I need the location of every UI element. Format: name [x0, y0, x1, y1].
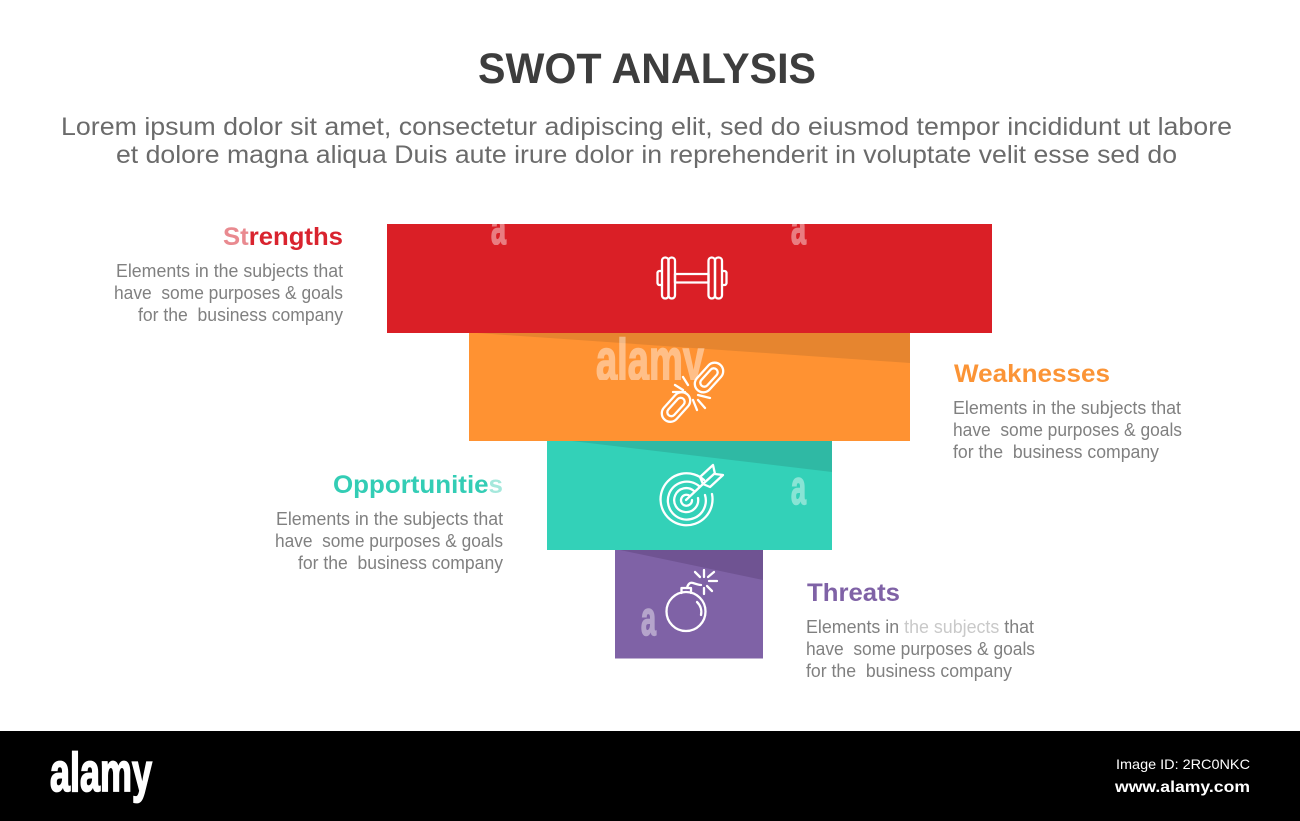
- icon: broken chain link: [658, 359, 727, 425]
- icon: bomb: [666, 570, 717, 631]
- watermark: a marks on strengths bar: a: [491, 202, 506, 255]
- footer logo: alamy: [50, 741, 152, 803]
- body: opportunities: for the business company: [298, 553, 503, 573]
- body: strengths: Elements in the subjects that: [116, 261, 343, 281]
- body: threats: have some purposes & goals: [806, 639, 1035, 659]
- body: opportunities: [275, 509, 503, 573]
- panel: weaknesses bar: [469, 328, 910, 441]
- body: weaknesses: [953, 398, 1182, 462]
- text block: weaknesses: [953, 360, 1182, 462]
- heading: opportunities: Opportunities: [333, 471, 503, 499]
- text block: opportunities: [275, 471, 503, 573]
- title: SWOT ANALYSIS: [478, 45, 816, 93]
- body: opportunities: have some purposes & goals: [275, 531, 503, 551]
- panel: opportunities bar: [547, 441, 832, 550]
- panel: threats bar: [615, 550, 763, 658]
- body: strengths: have some purposes & goals: [114, 283, 343, 303]
- subtitle text: et dolore magna aliqua Duis aute irure dolor in reprehenderit in voluptate velit esse sed do: [116, 141, 1177, 169]
- panel: strengths bar: [387, 224, 992, 333]
- body: weaknesses: for the business company: [953, 442, 1159, 462]
- icon: target with arrow: [661, 465, 723, 525]
- subtitle text: Lorem ipsum dolor sit amet, consectetur adipiscing elit, sed do eiusmod tempor incididunt ut labore: [61, 113, 1232, 141]
- watermark: a on threats bar: a: [641, 593, 656, 646]
- subtitle text: [61, 113, 1232, 169]
- text block: strengths: [114, 223, 343, 325]
- watermark: a marks on strengths bar: [491, 224, 807, 245]
- footer bar: [0, 731, 1300, 821]
- heading: strengths: Strengths: [223, 223, 343, 251]
- body: weaknesses: have some purposes & goals: [953, 420, 1182, 440]
- body: threats: Elements in the subjects that: [806, 617, 1034, 637]
- body: opportunities: Elements in the subjects that: [276, 509, 503, 529]
- body: threats: for the business company: [806, 661, 1012, 681]
- watermark: a marks on strengths bar: a: [791, 202, 806, 255]
- watermark: alamy on weaknesses bar: alamy: [596, 328, 704, 393]
- body: threats: [806, 617, 1035, 681]
- footer website: www.alamy.com: [1114, 779, 1250, 796]
- heading: threats: Threats: [807, 579, 900, 607]
- body: weaknesses: Elements in the subjects that: [953, 398, 1181, 418]
- footer image id: Image ID: 2RC0NKC: [1116, 756, 1250, 772]
- icon: dumbbell: [658, 258, 726, 298]
- text block: threats: [806, 579, 1035, 681]
- heading: weaknesses: Weaknesses: [954, 360, 1110, 388]
- body: strengths: for the business company: [138, 305, 343, 325]
- body: strengths: [114, 261, 343, 325]
- watermark: a on opportunities bar: a: [791, 462, 806, 515]
